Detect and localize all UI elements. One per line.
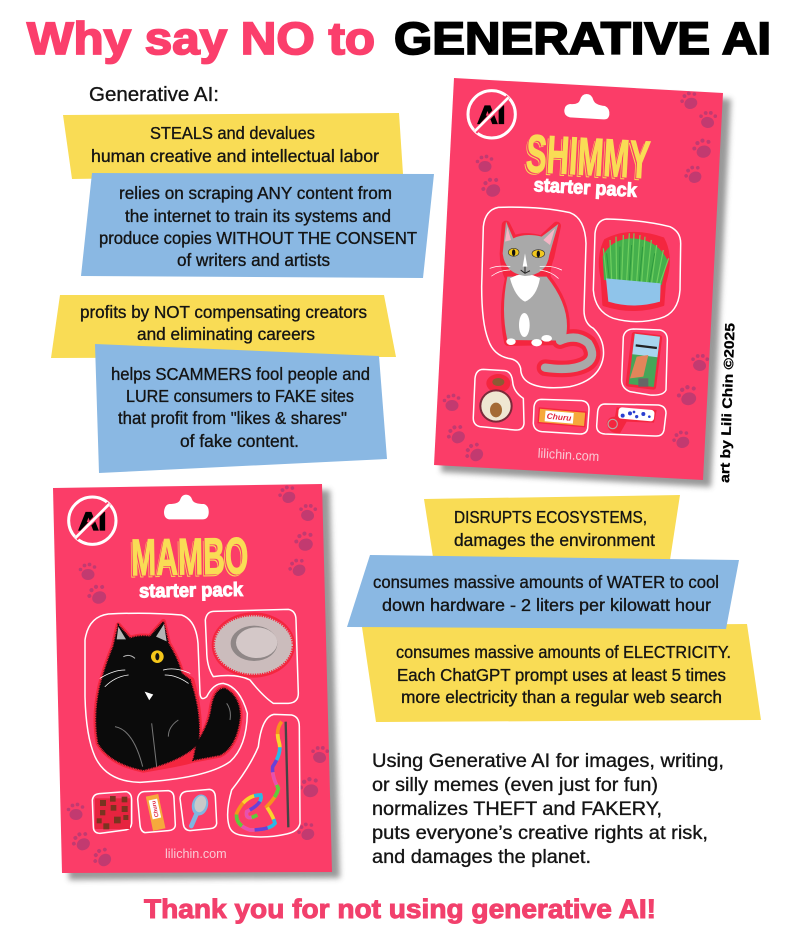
hang hole <box>564 94 609 119</box>
footer: thank you: Thank you for not using generative AI! <box>144 894 656 924</box>
panel: electricity: Each ChatGPT prompt uses at least 5 times <box>397 665 726 685</box>
paw prints <box>67 483 330 871</box>
illustration: churu treat <box>146 794 165 831</box>
tray: cat bed <box>205 609 298 703</box>
panel: water <box>347 555 739 629</box>
illustration: treats <box>95 796 130 829</box>
text block: closing statement: puts everyone’s creative rights at risk, <box>372 822 708 844</box>
illustration: grey cat <box>490 222 592 369</box>
panel: scraping content: produce copies WITHOUT THE CONSENT <box>99 228 417 248</box>
panel: scraping content: the internet to train its systems and <box>125 206 391 226</box>
panel: disrupts ecosystems: damages the environment <box>454 530 655 550</box>
panel: not compensating creators: and eliminating careers <box>137 324 315 344</box>
name: MAMBO: MAMBO <box>129 529 247 589</box>
illustration: churu treat: Churu <box>546 412 572 423</box>
panel: scraping content: relies on scraping ANY content from <box>119 183 392 203</box>
name: SHIMMY: SHIMMY <box>523 126 650 192</box>
name: MAMBO <box>129 526 249 589</box>
icon: no AI <box>468 91 515 138</box>
icon: no AI: AI <box>477 101 505 129</box>
panel: scammers: LURE consumers to FAKE sites <box>126 386 354 406</box>
panel: electricity: consumes massive amounts of ELECTRICITY. <box>396 642 731 662</box>
panel: not compensating creators <box>51 295 396 358</box>
illustration: cat grass <box>600 233 669 310</box>
heading: Generative AI: Generative AI: <box>89 84 219 106</box>
panel: electricity: more electricity than a regular web search <box>401 687 722 707</box>
illustration: catnip tin <box>479 374 513 423</box>
icon: no AI <box>69 497 116 544</box>
tray: treats <box>92 792 132 833</box>
tray: catnip tin <box>473 369 524 430</box>
tray: wand toy <box>228 714 300 837</box>
subtitle: starter pack: starter pack <box>139 580 243 602</box>
panel: electricity <box>362 624 761 722</box>
panel: scraping content <box>81 173 434 278</box>
paw prints <box>443 89 718 466</box>
illustration: churu treat <box>538 408 586 427</box>
panel: disrupts ecosystems <box>424 495 680 560</box>
tray: cat grass <box>593 219 681 322</box>
title: GENERATIVE AI <box>394 13 771 64</box>
text block: closing statement: and damages the planet. <box>372 846 591 868</box>
text block: closing statement <box>372 750 724 868</box>
tray: churu <box>138 791 175 833</box>
panel: Shimmy starter pack card <box>434 78 731 487</box>
tray: keychain <box>597 404 666 436</box>
panel: scammers: that profit from "likes & shares" <box>118 408 347 428</box>
illustration: cat bed <box>212 612 295 678</box>
panel: disrupts ecosystems: DISRUPTS ECOSYSTEMS, <box>454 507 647 527</box>
subtitle: starter pack: starter pack <box>533 175 638 202</box>
credit: art by Lili Chin: art by Lili Chin ©2025 <box>717 322 738 483</box>
website: lilichin.com: lilichin.com <box>537 446 600 464</box>
panel: scraping content: of writers and artists <box>177 250 330 270</box>
panel: steals labor: human creative and intellectual labor <box>91 146 379 166</box>
illustration: hair brush <box>190 793 210 826</box>
illustration: keychain toy <box>607 407 657 433</box>
tray: churu <box>533 399 589 434</box>
panel: Mambo starter pack card <box>53 483 340 880</box>
panel: water: consumes massive amounts of WATER to cool <box>373 572 719 592</box>
name: SHIMMY <box>522 124 652 193</box>
name: MAMBO: MAMBO <box>129 528 247 588</box>
panel: steals labor <box>63 113 403 179</box>
illustration: treats pouch <box>625 332 662 390</box>
name: SHIMMY: SHIMMY <box>525 125 652 190</box>
title <box>27 13 771 64</box>
panel: scammers: helps SCAMMERS fool people and <box>111 364 370 384</box>
illustration: churu treat: Churu <box>151 799 161 818</box>
text block: closing statement: or silly memes (even just for fun) <box>372 774 658 796</box>
name: MAMBO: MAMBO <box>131 526 249 586</box>
text block: closing statement: normalizes THEFT and FAKERY, <box>372 798 662 820</box>
tray: cat <box>482 207 604 388</box>
panel: water: down hardware - 2 liters per kilowatt hour <box>382 595 711 615</box>
panel: steals labor: STEALS and devalues <box>150 123 315 143</box>
icon: no AI: AI <box>78 508 106 536</box>
panel: scammers: of fake content. <box>180 431 299 451</box>
tray: treats pouch <box>622 329 667 395</box>
tray: hair brush <box>180 789 217 831</box>
panel: not compensating creators: profits by NOT compensating creators <box>80 302 367 322</box>
text block: closing statement: Using Generative AI for images, writing, <box>372 750 724 772</box>
illustration: rainbow wand toy <box>236 722 288 830</box>
illustration: black cat <box>96 622 240 770</box>
website: lilichin.com: lilichin.com <box>165 846 227 861</box>
title: Why say NO to <box>27 13 375 64</box>
name: SHIMMY: SHIMMY <box>522 127 650 193</box>
hang hole <box>164 495 209 519</box>
panel: scammers <box>95 344 387 473</box>
tray: cat <box>85 613 247 782</box>
